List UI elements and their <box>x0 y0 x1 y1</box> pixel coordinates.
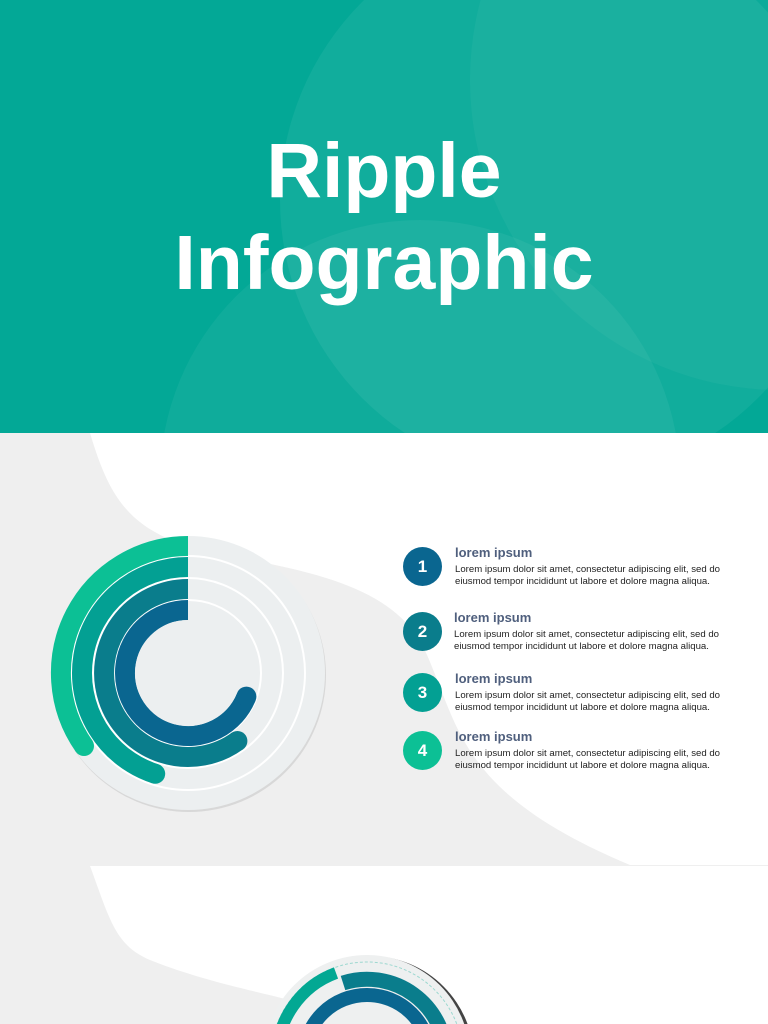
item 1 <box>403 545 720 587</box>
item 2: lorem ipsum <box>454 610 531 625</box>
item 3: 3 <box>418 683 427 702</box>
chart: ripple rings <box>50 536 326 812</box>
item 2: 2 <box>418 622 427 641</box>
item 4 <box>403 729 720 771</box>
title: Ripple <box>266 128 502 214</box>
item 2 <box>403 610 719 652</box>
item 4: 4 <box>418 741 427 760</box>
item 3: eiusmod tempor incididunt ut labore et dolore magna aliqua. <box>455 702 710 713</box>
item 2: Lorem ipsum dolor sit amet, consectetur adipiscing elit, sed do <box>454 629 719 640</box>
chart: partial second ripple <box>276 955 468 1024</box>
title: Infographic <box>174 220 594 306</box>
header banner <box>0 0 768 433</box>
item 1: Lorem ipsum dolor sit amet, consectetur adipiscing elit, sed do <box>455 564 720 575</box>
item 1: eiusmod tempor incididunt ut labore et dolore magna aliqua. <box>455 576 710 587</box>
item 4: lorem ipsum <box>455 729 532 744</box>
item 3 <box>403 671 720 713</box>
title <box>174 128 594 306</box>
item 3: Lorem ipsum dolor sit amet, consectetur adipiscing elit, sed do <box>455 690 720 701</box>
item 1: lorem ipsum <box>455 545 532 560</box>
item 3: lorem ipsum <box>455 671 532 686</box>
item 4: eiusmod tempor incididunt ut labore et dolore magna aliqua. <box>455 760 710 771</box>
item 4: Lorem ipsum dolor sit amet, consectetur adipiscing elit, sed do <box>455 748 720 759</box>
item 2: eiusmod tempor incididunt ut labore et dolore magna aliqua. <box>454 641 709 652</box>
item 1: 1 <box>418 557 427 576</box>
